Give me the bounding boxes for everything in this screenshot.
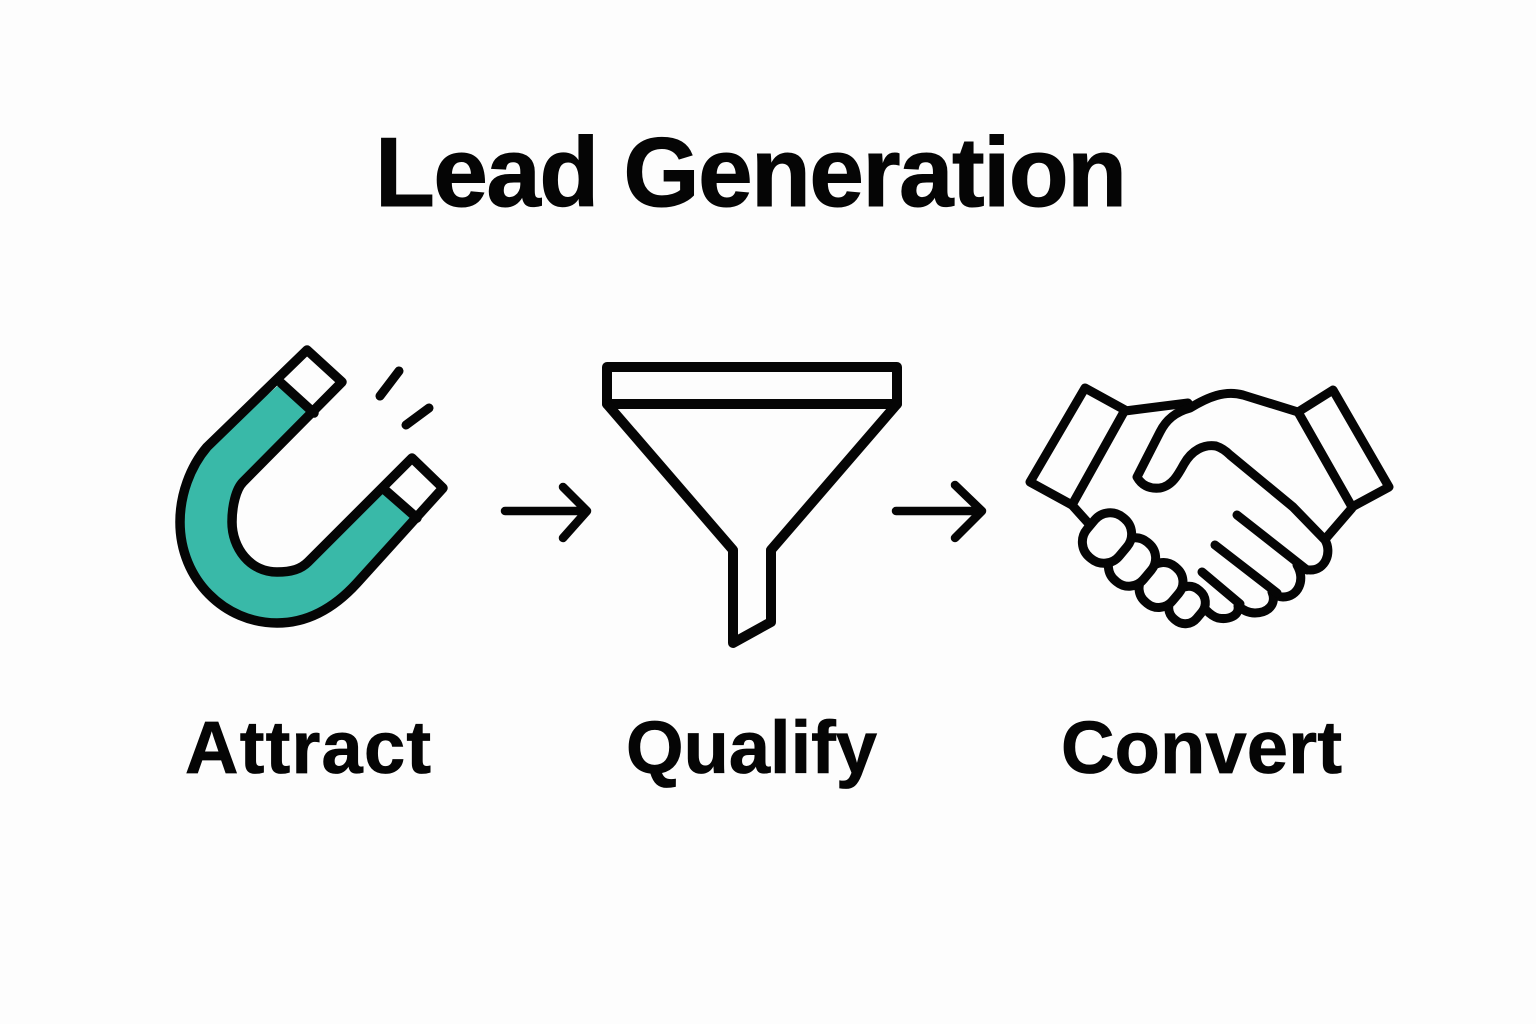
right cuff — [1298, 390, 1389, 507]
left cuff — [1030, 388, 1125, 505]
icon: funnel — [607, 367, 897, 643]
funnel rim — [607, 367, 897, 404]
label: Qualify: Qualify — [626, 706, 877, 789]
icon: magnet — [180, 350, 443, 623]
left hand top and wrist — [1072, 403, 1188, 525]
finger 3 — [1132, 555, 1190, 615]
left hand fingers — [1074, 505, 1211, 630]
magnetic sparks — [380, 371, 429, 425]
arrow: qualify to convert — [896, 485, 982, 538]
label: Attract: Attract — [185, 706, 431, 789]
funnel cone and spout — [607, 404, 897, 643]
finger 4 — [1163, 580, 1211, 630]
magnet body — [180, 383, 417, 623]
title: Lead Generation — [375, 117, 1127, 227]
magnet outline — [180, 350, 443, 623]
magnet pole dividers — [281, 383, 417, 518]
icon: handshake — [1030, 388, 1389, 630]
arrow: attract to qualify — [505, 487, 587, 538]
label: Convert: Convert — [1061, 706, 1342, 789]
right wrist — [1327, 508, 1352, 537]
finger 2 — [1101, 530, 1163, 594]
finger 1 — [1074, 505, 1140, 571]
right hand outline — [1137, 393, 1328, 618]
finger lines — [1202, 515, 1307, 604]
